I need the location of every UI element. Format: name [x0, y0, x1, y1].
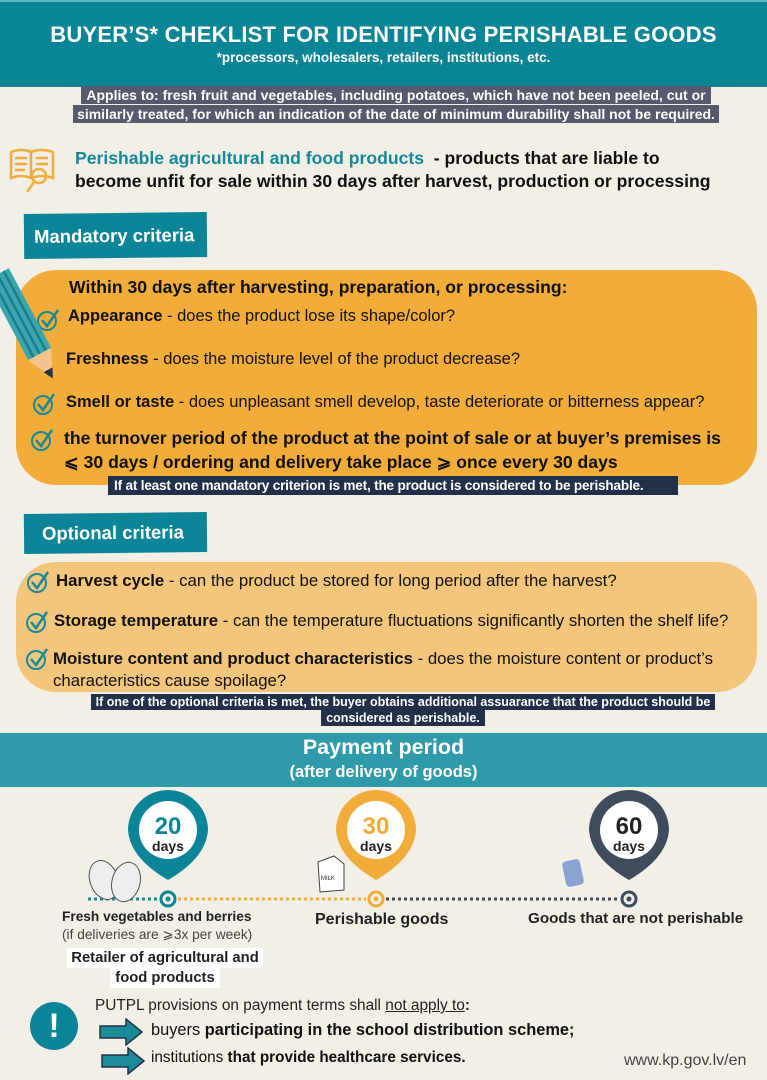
- icon: milk carton: [318, 856, 344, 892]
- tab: mandatory criteria: Mandatory criteria: [34, 224, 194, 246]
- icon: strawberries: [84, 856, 145, 905]
- note: optional: If one of the optional criteria is met, the buyer obtains additional assuarance that the product should be: [96, 695, 710, 709]
- title: BUYER’S* CHEKLIST FOR IDENTIFYING PERISHABLE GOODS: [50, 22, 717, 47]
- icon: book with magnifier: [10, 148, 54, 193]
- pin: 60 days: [589, 790, 669, 906]
- exceptions text: PUTPL provisions on payment terms shall not apply to:: [95, 997, 470, 1014]
- icon: pencil: [0, 268, 53, 378]
- item: appearance: Appearance - does the product lose its shape/color?: [68, 307, 455, 325]
- retailer box: [67, 948, 263, 988]
- item: harvest: Harvest cycle - can the product be stored for long period after the harvest?: [56, 571, 617, 590]
- item: smell: Smell or taste - does unpleasant smell develop, taste deteriorate or bitterness appear?: [66, 393, 704, 411]
- banner subtitle: (after delivery of goods): [290, 763, 477, 781]
- item: moisture: [53, 649, 713, 690]
- label: 20 days: Fresh vegetables and berries: [62, 909, 251, 924]
- arrow 1: [99, 1018, 144, 1046]
- item: turnover: ⩽ 30 days / ordering and delivery take place ⩾ once every 30 days: [64, 452, 618, 472]
- applies-to note: [73, 86, 719, 123]
- retailer box: food products: [115, 970, 215, 986]
- note: mandatory: If at least one mandatory criterion is met, the product is considered to be perishable.: [114, 478, 644, 493]
- label: 30 days: Perishable goods: [315, 911, 448, 928]
- exception 1: buyers participating in the school distribution scheme;: [151, 1021, 574, 1039]
- tab: optional criteria: Optional criteria: [42, 521, 184, 544]
- item: moisture: Moisture content and product characteristics - does the moisture content or product’s: [53, 649, 713, 668]
- pin: 20 days: days: [152, 838, 184, 854]
- icon: exclamation: !: [48, 1007, 60, 1045]
- pin: 30 days: [336, 790, 416, 906]
- definition text: become unfit for sale within 30 days after harvest, production or processing: [75, 171, 710, 191]
- icon: exclamation: [30, 1002, 78, 1050]
- label: 60 days: Goods that are not perishable: [528, 910, 743, 927]
- panel: mandatory criteria: [16, 270, 757, 485]
- header banner: [0, 0, 767, 87]
- website: www.kp.gov.lv/en: [624, 1052, 746, 1069]
- checkmarks: [26, 571, 49, 670]
- definition text: Perishable agricultural and food products - products that are liable to: [75, 148, 660, 168]
- label: 20 days: (if deliveries are ⩾3x per week): [62, 927, 252, 942]
- checkmarks: [31, 309, 59, 451]
- applies-to note: Applies to: fresh fruit and vegetables, including potatoes, which have not been peeled, cut or: [86, 87, 706, 103]
- subtitle: *processors, wholesalers, retailers, institutions, etc.: [217, 50, 550, 65]
- pin: 60 days: 60: [616, 813, 642, 840]
- icon: milk carton: MILK: [321, 876, 335, 882]
- arrow 2: [101, 1047, 146, 1075]
- pin: 30 days: 30: [363, 813, 389, 840]
- pin: 20 days: 20: [155, 813, 181, 840]
- timeline: [88, 790, 669, 908]
- item: moisture: characteristics cause spoilage?: [53, 671, 286, 690]
- applies-to note: similarly treated, for which an indication of the date of minimum durability shall not be required.: [77, 106, 715, 122]
- item: turnover: the turnover period of the product at the point of sale or at buyer’s premises is: [64, 428, 721, 448]
- icon: can: [561, 858, 585, 888]
- tab: mandatory criteria: [24, 212, 207, 259]
- note: optional: considered as perishable.: [326, 711, 480, 725]
- panel: optional criteria: [16, 562, 757, 692]
- pin: 30 days: days: [360, 838, 392, 854]
- item: freshness: Freshness - does the moisture level of the product decrease?: [66, 350, 520, 368]
- exception 2: institutions that provide healthcare services.: [151, 1049, 466, 1066]
- pin: 20 days: [128, 790, 208, 906]
- item: turnover: [64, 428, 721, 472]
- retailer box: Retailer of agricultural and: [71, 950, 259, 966]
- dotted line: [88, 898, 620, 900]
- banner title: Payment period: [303, 735, 464, 759]
- heading: Within 30 days after harvesting, preparation, or processing:: [69, 277, 567, 297]
- label: 20 days: [62, 909, 252, 942]
- definition text: [75, 148, 710, 191]
- note: optional: [91, 694, 715, 726]
- tab: optional criteria: [24, 512, 207, 554]
- pin: 60 days: days: [613, 838, 645, 854]
- item: storage: Storage temperature - can the temperature fluctuations significantly shorten the shelf life?: [54, 611, 728, 630]
- payment period banner: [0, 733, 767, 787]
